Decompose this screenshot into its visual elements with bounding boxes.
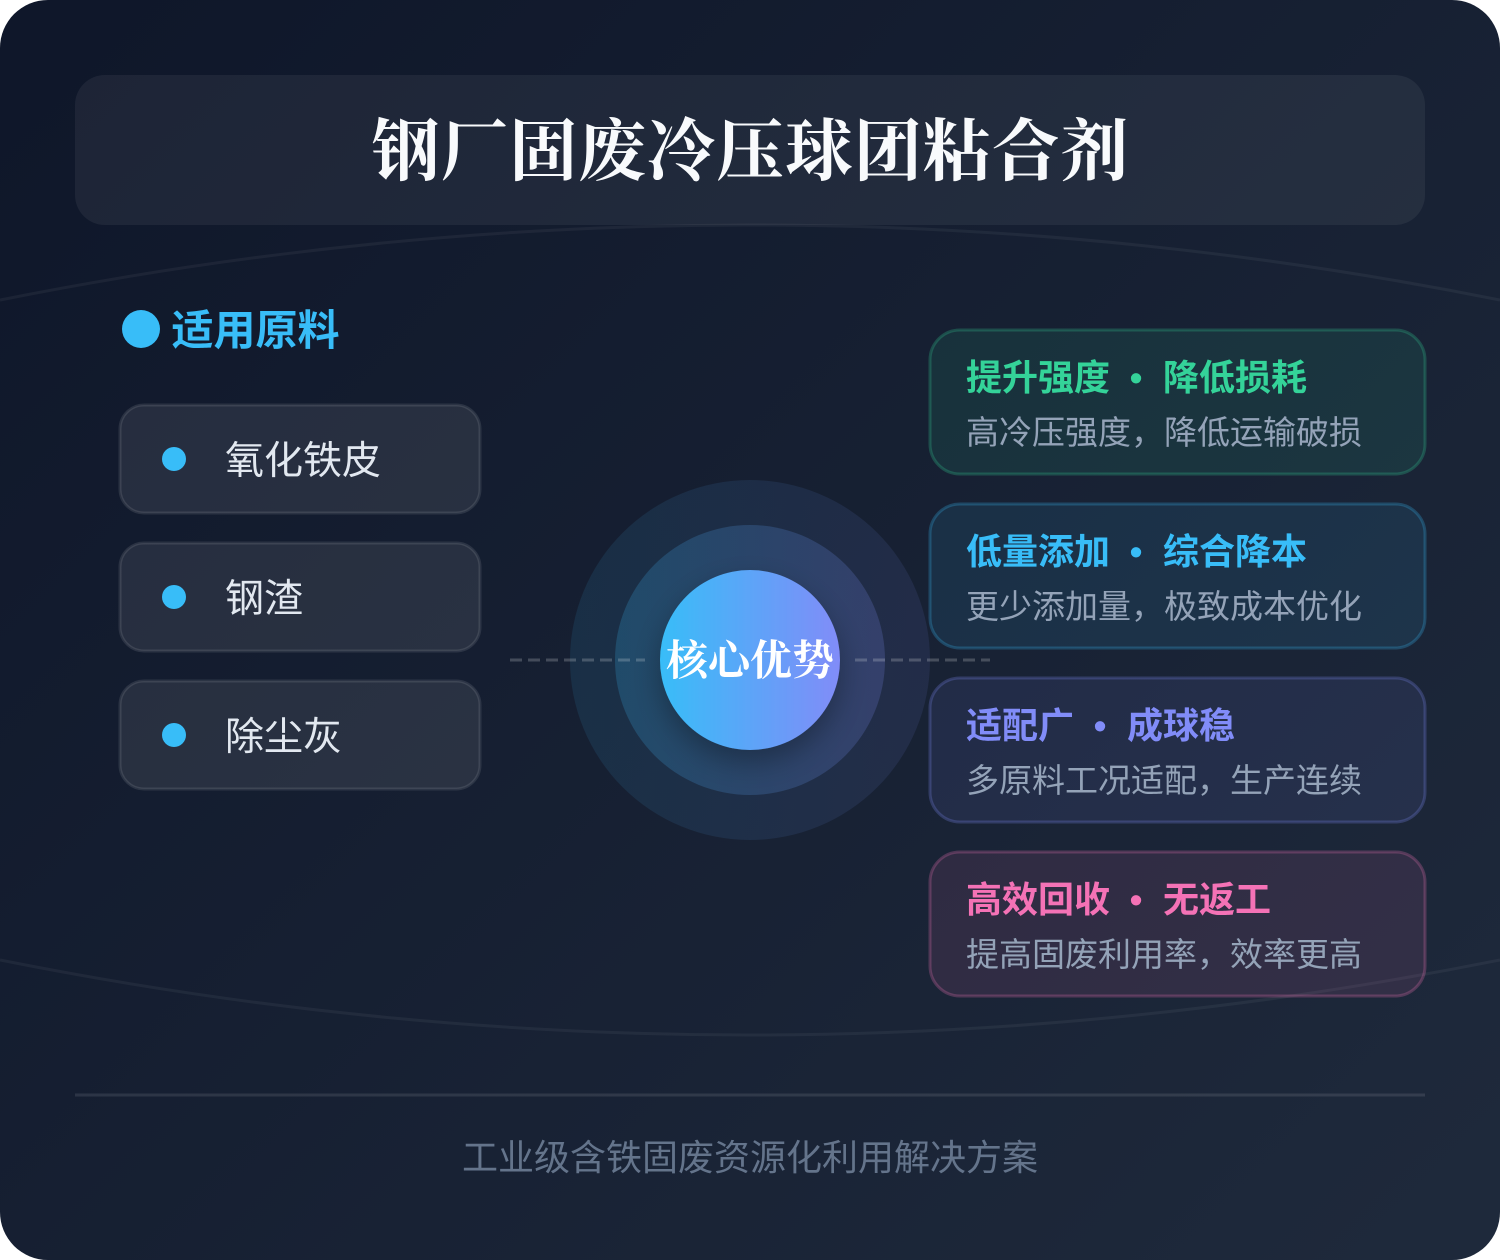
benefit card: low dosage: 低量添加 xyxy=(966,531,1110,572)
benefit card: strength: 降低损耗 xyxy=(1163,357,1307,398)
material item 2 xyxy=(120,543,480,651)
benefit card: adaptability xyxy=(930,678,1425,822)
panel: applicable materials xyxy=(120,307,480,789)
core advantage diagram xyxy=(510,480,990,840)
material item 3 xyxy=(120,681,480,789)
material item 1 xyxy=(120,405,480,513)
benefit card: low dosage: 更少添加量，极致成本优化 xyxy=(966,588,1362,625)
benefit card: low dosage: 综合降本 xyxy=(1163,531,1307,572)
benefit card: strength: 提升强度 xyxy=(966,357,1110,398)
footer tagline: 工业级含铁固废资源化利用解决方案 xyxy=(462,1137,1038,1178)
material item 3: 除尘灰 xyxy=(225,716,342,759)
benefit card: adaptability: • xyxy=(1094,705,1106,746)
benefit card: adaptability: 多原料工况适配，生产连续 xyxy=(966,762,1362,799)
benefit card: adaptability: 成球稳 xyxy=(1127,705,1235,746)
benefit card: recovery: 高效回收 xyxy=(966,879,1110,920)
benefit card: low dosage: • xyxy=(1130,531,1142,572)
benefit card: strength: 高冷压强度，降低运输破损 xyxy=(966,414,1362,451)
benefit card: strength: • xyxy=(1130,357,1142,398)
benefit card: strength xyxy=(930,330,1425,474)
heading: materials: 适用原料 xyxy=(172,307,340,354)
core label: 核心优势 xyxy=(666,638,834,685)
material item 1: 氧化铁皮 xyxy=(225,440,381,483)
benefit card: low dosage xyxy=(930,504,1425,648)
title: 钢厂固废冷压球团粘合剂 xyxy=(372,114,1129,190)
title panel xyxy=(75,75,1425,225)
benefit card: recovery xyxy=(930,852,1425,996)
benefit card: recovery: 无返工 xyxy=(1163,879,1271,920)
benefit card: recovery: • xyxy=(1130,879,1142,920)
benefit card: adaptability: 适配广 xyxy=(966,705,1074,746)
panel: benefits xyxy=(930,330,1425,996)
benefit card: recovery: 提高固废利用率，效率更高 xyxy=(966,936,1362,973)
material item 2: 钢渣 xyxy=(225,578,303,621)
